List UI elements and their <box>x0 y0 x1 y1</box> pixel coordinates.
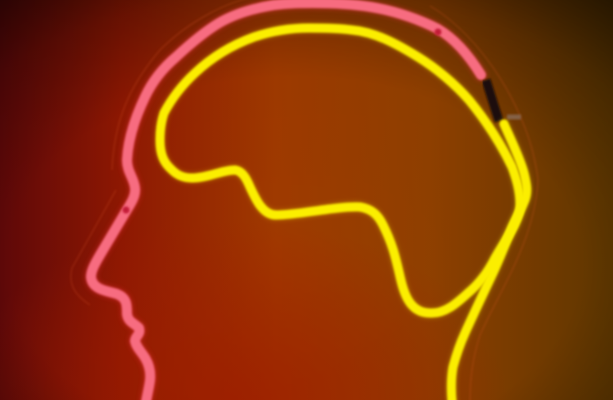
neon tube joints <box>122 28 442 214</box>
pink neon tube: head profile <box>91 3 481 400</box>
yellow neon tube: brain outline <box>160 28 520 313</box>
faint outer contour line <box>71 0 538 400</box>
black tube connector <box>486 80 521 121</box>
yellow neon tube: neck line <box>451 124 527 400</box>
